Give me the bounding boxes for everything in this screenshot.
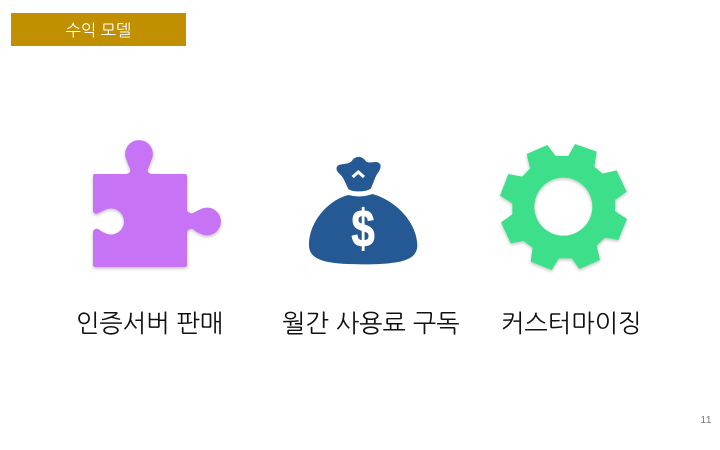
page number: 11 [700,415,712,426]
icon: money bag [309,157,417,264]
label: certificate server sales: 인증서버 판매 [76,310,223,338]
title banner: 수익 모델 [66,22,131,40]
label: customizing: 커스터마이징 [501,310,641,338]
title banner [11,13,186,46]
icon: gear [500,144,627,270]
dollar sign: $ [351,200,375,259]
icon: puzzle piece [93,140,221,267]
label: monthly subscription: 월간 사용료 구독 [282,310,460,338]
